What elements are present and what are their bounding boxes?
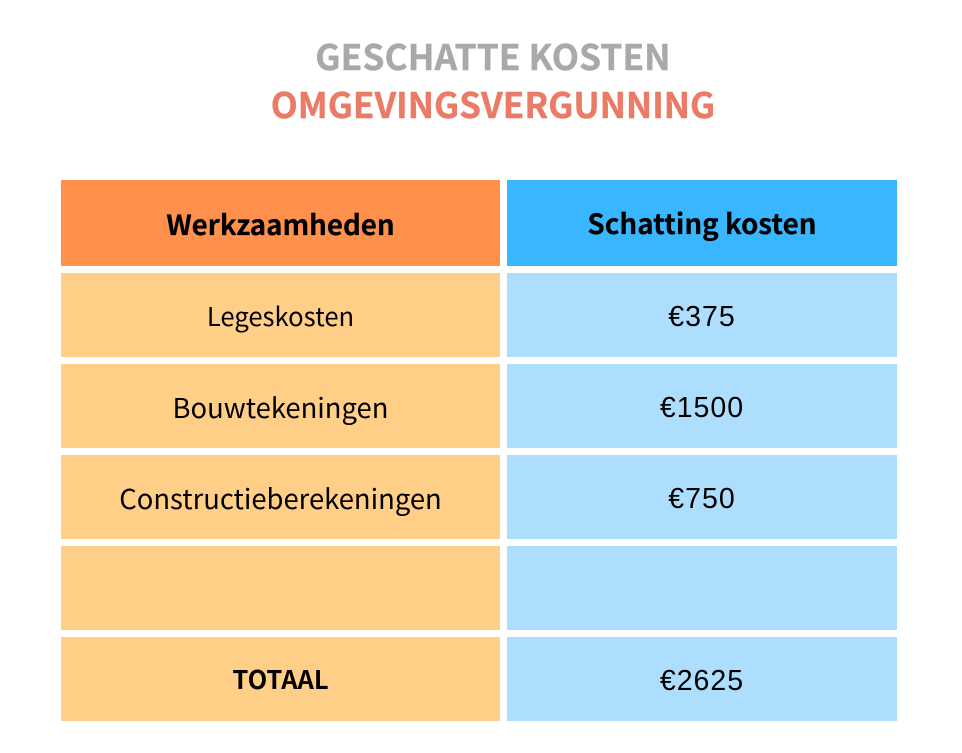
row label: Constructieberekeningen — [61, 455, 500, 539]
empty row value cell — [507, 546, 897, 630]
total value: €2625 — [660, 665, 744, 697]
row value: 375 — [507, 273, 897, 357]
title line 2: OMGEVINGSVERGUNNING — [271, 78, 715, 129]
row label: Bouwtekeningen: Bouwtekeningen — [173, 386, 388, 426]
row label: Legeskosten: Legeskosten — [207, 297, 354, 334]
header: Schatting kosten — [507, 180, 897, 266]
row label: Bouwtekeningen — [61, 364, 500, 448]
total label — [61, 637, 500, 721]
header: Werkzaamheden: Werkzaamheden — [166, 203, 395, 243]
empty row label cell — [61, 546, 500, 630]
row value: 750 — [507, 455, 897, 539]
row value: 375: €375 — [668, 301, 736, 333]
total value — [507, 637, 897, 721]
title line 1: GESCHATTE KOSTEN — [315, 30, 671, 81]
row label: Legeskosten — [61, 273, 500, 357]
row value: 750: €750 — [668, 483, 736, 515]
row value: 1500: €1500 — [660, 392, 744, 424]
row value: 1500 — [507, 364, 897, 448]
header: Werkzaamheden — [61, 180, 500, 266]
header: Schatting kosten: Schatting kosten — [587, 203, 817, 243]
row label: Constructieberekeningen: Constructieberekeningen — [119, 477, 442, 517]
table — [61, 180, 897, 721]
title — [271, 30, 715, 129]
total label: TOTAAL — [232, 660, 329, 697]
